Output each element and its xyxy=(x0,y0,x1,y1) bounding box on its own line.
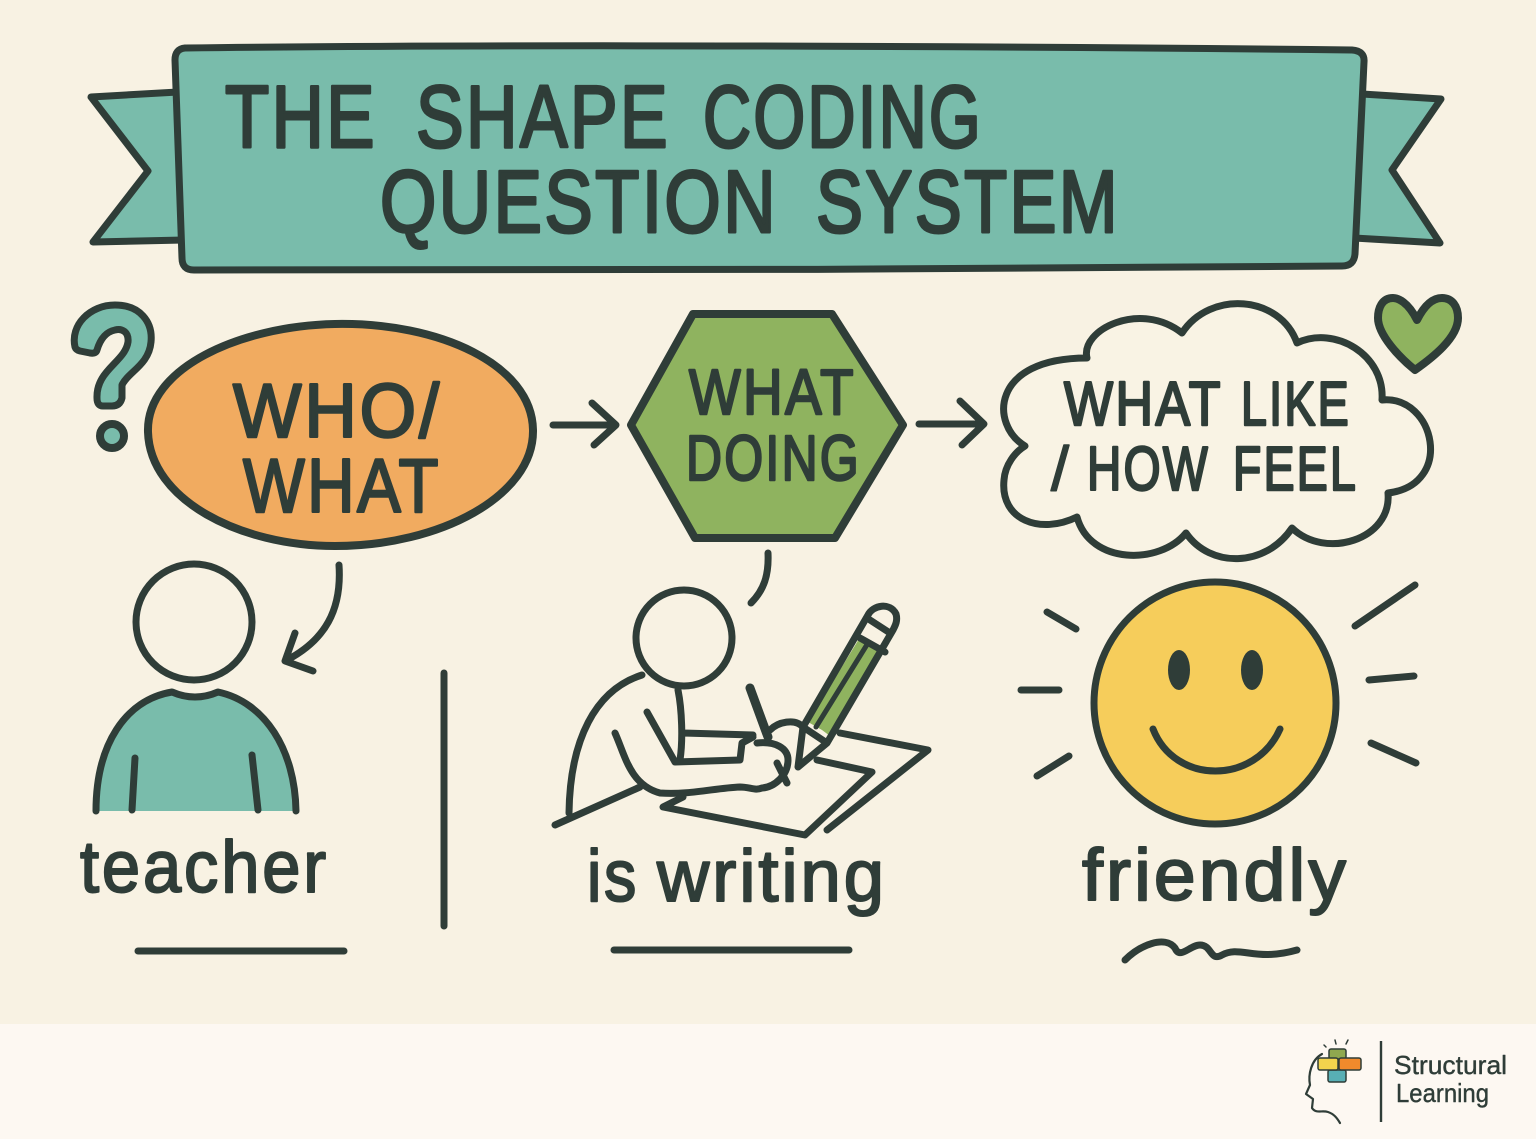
arrow: oval to teacher xyxy=(285,565,339,671)
icon: heart xyxy=(1378,298,1458,370)
label: how feel: FEEL xyxy=(1233,435,1358,504)
title line 1: SHAPE xyxy=(416,67,670,166)
arrow: oval to hexagon xyxy=(553,403,616,445)
logo blocks xyxy=(1329,1049,1346,1059)
title line 2: QUESTION xyxy=(380,152,778,251)
logo text: learning: Learning xyxy=(1396,1078,1489,1108)
logo text: structural: Structural xyxy=(1394,1050,1507,1080)
panel: what like / how feel cloud xyxy=(1004,304,1431,559)
left eye xyxy=(1168,650,1190,690)
paper xyxy=(663,733,928,835)
body and arm xyxy=(555,675,803,825)
title line 1: CODING xyxy=(703,67,983,166)
banner left ribbon tail xyxy=(91,92,184,242)
label: what like xyxy=(1064,370,1351,439)
banner right ribbon tail xyxy=(1354,94,1441,243)
icon: question mark xyxy=(74,305,151,448)
right eye xyxy=(1241,650,1263,690)
pen xyxy=(750,688,768,737)
logo: Structural Learning xyxy=(1306,1040,1507,1123)
banner main panel xyxy=(175,46,1364,270)
icon: person writing xyxy=(555,590,928,835)
label: how feel: / xyxy=(1051,435,1070,504)
icon: smiley face xyxy=(1021,582,1416,824)
logo sparks xyxy=(1324,1040,1348,1047)
label: is writing: writing xyxy=(656,836,887,917)
title banner xyxy=(91,46,1441,270)
label: what like: WHAT xyxy=(1064,370,1223,439)
pencil xyxy=(808,639,880,736)
logo head outline xyxy=(1306,1054,1340,1123)
smile xyxy=(1153,729,1280,771)
squiggle underline xyxy=(1125,942,1297,960)
label: teacher: teacher xyxy=(80,827,329,908)
arrow: hexagon to cloud xyxy=(919,401,984,445)
logo divider xyxy=(1380,1041,1382,1122)
label: what: WHAT xyxy=(689,356,856,428)
title line 1 xyxy=(225,67,983,166)
sun rays xyxy=(1021,585,1416,776)
answer line: is writing xyxy=(614,946,849,954)
label: what: WHAT xyxy=(243,444,441,529)
label: what like: LIKE xyxy=(1241,370,1351,439)
panel: who/what oval xyxy=(148,324,533,546)
label: how feel: HOW xyxy=(1087,435,1210,504)
icon: teacher figure xyxy=(96,564,296,811)
title line 1: THE xyxy=(225,67,377,166)
label: doing: DOING xyxy=(686,422,861,494)
label: how feel xyxy=(1051,435,1358,504)
title line 2: SYSTEM xyxy=(816,152,1120,251)
label: who/what: WHO/ xyxy=(233,369,442,454)
divider line xyxy=(440,673,448,926)
label: friendly: friendly xyxy=(1082,835,1349,916)
arrow: hexagon to writer xyxy=(751,553,768,603)
label: is writing: is xyxy=(587,836,639,917)
panel: what doing hexagon xyxy=(631,314,903,538)
answer line: teacher xyxy=(138,948,344,954)
title line 2 xyxy=(380,152,1120,251)
